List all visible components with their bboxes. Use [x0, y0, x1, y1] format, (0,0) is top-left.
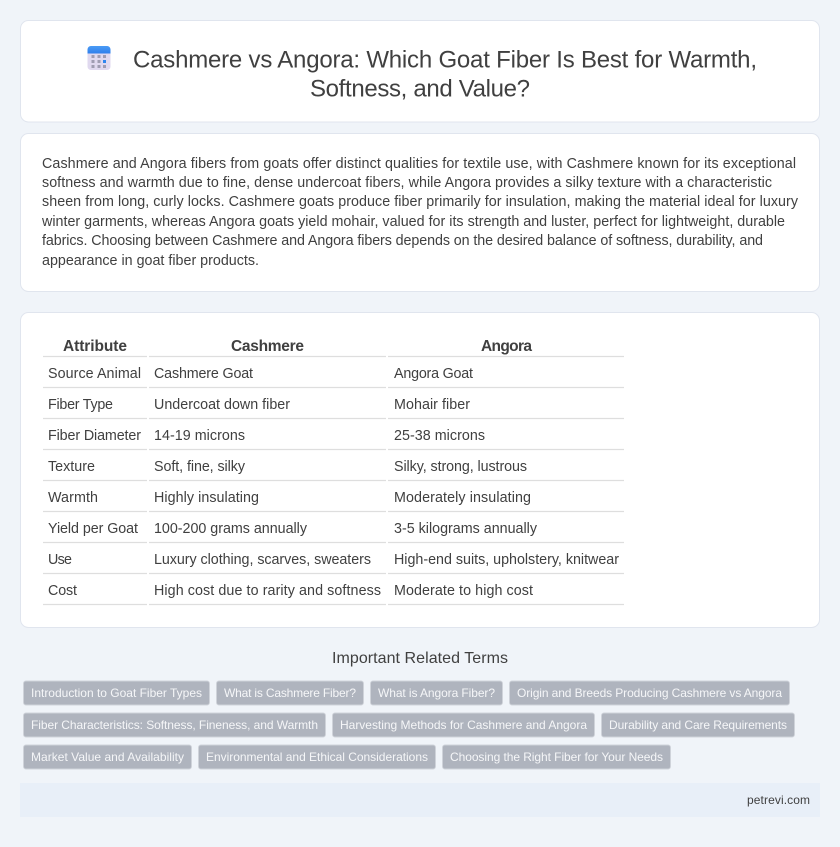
table row: source animal: Angora Goat	[394, 366, 473, 382]
chip	[510, 681, 790, 705]
table header: Angora	[481, 338, 532, 355]
table header: Cashmere	[231, 338, 304, 355]
table row: cost: Moderate to high cost	[394, 583, 533, 599]
table row: warmth: Highly insulating	[154, 490, 259, 506]
chip: Market Value and Availability	[31, 750, 184, 764]
chip	[332, 713, 594, 737]
table header: Attribute	[63, 338, 127, 355]
panel: intro paragraph	[20, 134, 820, 292]
table row: fiber type: Fiber Type	[48, 397, 113, 413]
table row: fiber type: Undercoat down fiber	[154, 397, 290, 413]
table row: source animal: Cashmere Goat	[154, 366, 253, 382]
table row: fiber diameter: 25-38 microns	[394, 428, 485, 444]
table row: texture: Soft, fine, silky	[154, 459, 246, 475]
chip: Origin and Breeds Producing Cashmere vs Angora	[517, 686, 782, 700]
table row: texture	[48, 459, 527, 475]
chip	[24, 681, 210, 705]
table row: use: High-end suits, upholstery, knitwear	[394, 552, 619, 568]
table row: source animal	[48, 366, 473, 382]
text block: intro: Cashmere and Angora fibers from goats offer distinct qualities for textile use, with Cashmere known for its exceptional	[42, 156, 796, 172]
title: Softness, and Value?	[310, 76, 530, 102]
table row: warmth: Warmth	[48, 490, 98, 506]
chip	[602, 713, 794, 737]
chip	[24, 745, 192, 769]
table row: texture: Texture	[48, 459, 95, 475]
table row: yield per goat: 100-200 grams annually	[154, 521, 308, 537]
table row: fiber type	[48, 397, 470, 413]
table row: cost: High cost due to rarity and softness	[154, 583, 381, 599]
chip	[442, 745, 670, 769]
title	[133, 46, 757, 102]
chip: Harvesting Methods for Cashmere and Angora	[340, 718, 587, 732]
table row: fiber diameter: 14-19 microns	[154, 428, 245, 444]
table row: warmth	[48, 490, 531, 506]
panel: comparison table	[20, 312, 820, 628]
chip: Environmental and Ethical Considerations	[206, 750, 428, 764]
footer: petrevi.com	[747, 793, 810, 807]
icon: calendar	[88, 46, 110, 70]
footer	[20, 783, 820, 817]
chip: Introduction to Goat Fiber Types	[31, 686, 202, 700]
chip: Durability and Care Requirements	[609, 718, 787, 732]
table row: fiber type: Mohair fiber	[394, 397, 470, 413]
panel: header	[20, 20, 820, 122]
table row: use: Use	[48, 552, 72, 568]
table row: texture: Silky, strong, lustrous	[394, 459, 527, 475]
table header	[63, 338, 532, 355]
text block: intro	[41, 156, 799, 269]
chip: What is Cashmere Fiber?	[224, 686, 356, 700]
table row: yield per goat: Yield per Goat	[48, 521, 138, 537]
title: Cashmere vs Angora: Which Goat Fiber Is Best for Warmth,	[133, 46, 757, 74]
chip: Choosing the Right Fiber for Your Needs	[450, 750, 663, 764]
text block: intro: softness and warmth due to fine, dense undercoat fibers, while Angora provides a silky texture with a characteristic	[42, 175, 772, 191]
heading: important related terms: Important Related Terms	[332, 650, 508, 667]
text block: intro: fabrics. Choosing between Cashmere and Angora fibers depends on the desired balance of softness, durability, and	[42, 233, 763, 249]
chip	[370, 681, 502, 705]
table row: fiber diameter	[48, 428, 485, 444]
panel: related term chips	[24, 681, 794, 769]
table row: use: Luxury clothing, scarves, sweaters	[154, 552, 371, 568]
text block: intro: appearance in goat fiber products.	[42, 253, 259, 269]
table row: fiber diameter: Fiber Diameter	[48, 428, 141, 444]
chip: What is Angora Fiber?	[378, 686, 495, 700]
chip: Fiber Characteristics: Softness, Fineness, and Warmth	[31, 718, 318, 732]
table row: cost	[48, 583, 533, 599]
text block: intro: sheen from long, curly locks. Cashmere goats produce fiber primarily for insulation, making the material ideal for luxury	[42, 194, 799, 210]
table row: use	[48, 552, 619, 568]
chip	[198, 745, 436, 769]
table row: source animal: Source Animal	[48, 366, 141, 382]
text block: intro: winter garments, whereas Angora goats yield mohair, valued for its strength and luster, perfect for lightweight, durable	[41, 214, 785, 230]
chip	[216, 681, 364, 705]
table row: yield per goat	[48, 521, 538, 537]
table row: warmth: Moderately insulating	[394, 490, 531, 506]
table row: cost: Cost	[48, 583, 77, 599]
chip	[24, 713, 326, 737]
table row: yield per goat: 3-5 kilograms annually	[394, 521, 538, 537]
